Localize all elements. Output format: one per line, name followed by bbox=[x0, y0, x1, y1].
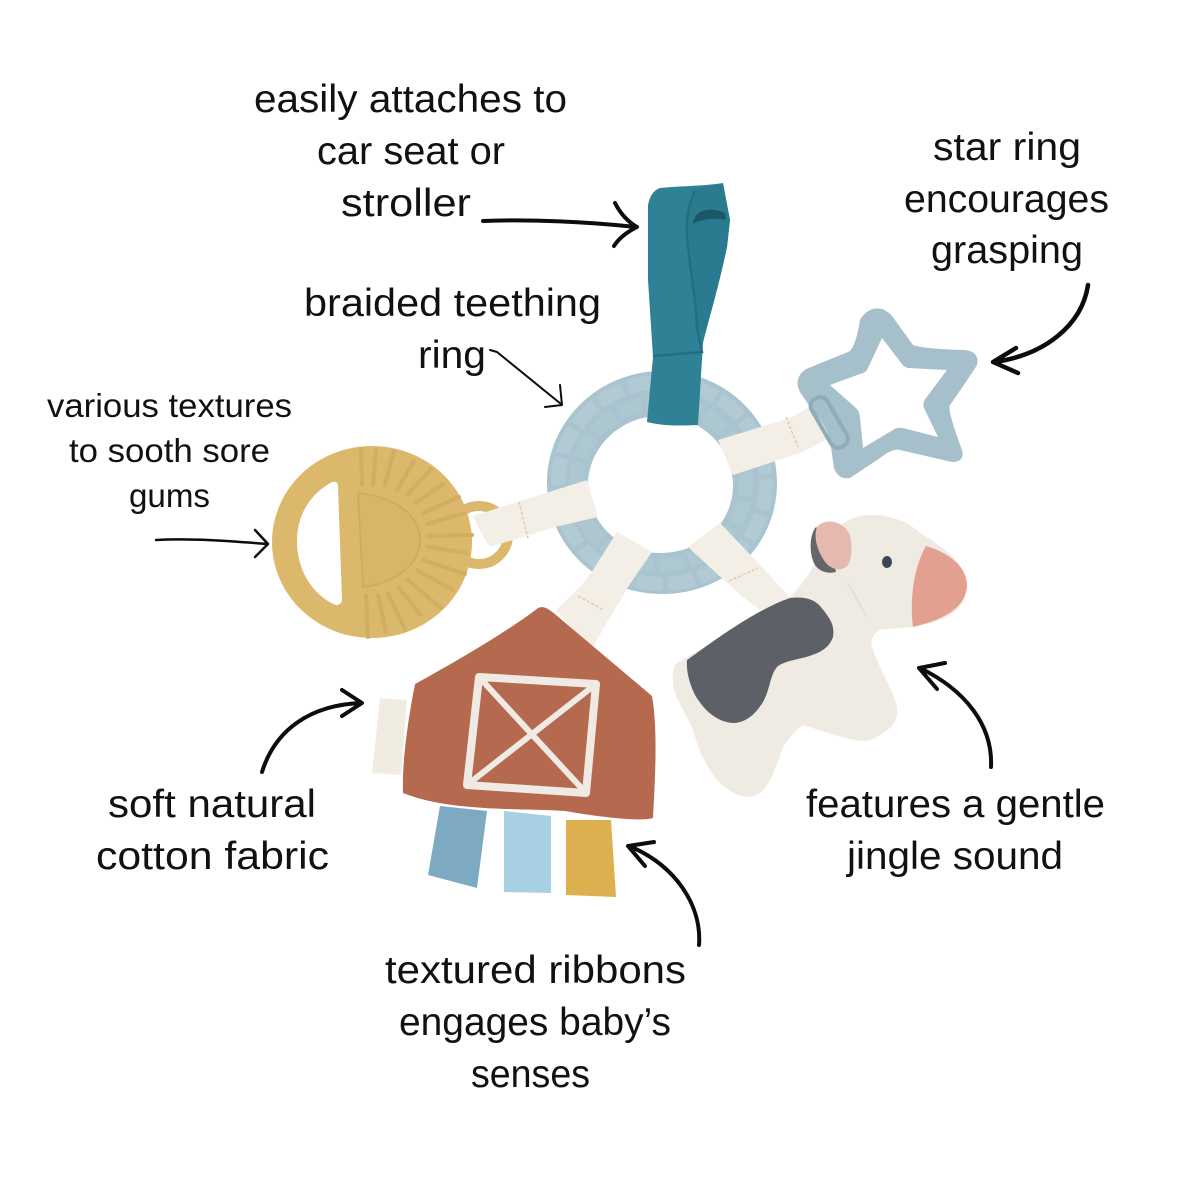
arrow to sun bbox=[156, 530, 268, 557]
arrow to star bbox=[993, 285, 1088, 373]
barn toy bbox=[372, 607, 656, 897]
label: cotton: cotton fabric bbox=[96, 835, 329, 878]
label: textures bbox=[47, 387, 292, 514]
label: braided ring bbox=[304, 282, 601, 377]
sun teether bbox=[272, 446, 508, 638]
arrow to ribbons bbox=[628, 842, 699, 945]
label: braided ring: braided teething bbox=[304, 282, 601, 325]
label: attaches: easily attaches to bbox=[254, 78, 567, 121]
label: attaches: car seat or bbox=[317, 130, 505, 173]
star ring bbox=[798, 308, 978, 478]
label: attaches bbox=[254, 78, 567, 225]
cow toy bbox=[673, 515, 967, 797]
arrow to cow bbox=[919, 663, 991, 767]
label: ribbons: engages baby’s bbox=[399, 1001, 671, 1044]
label: textures: to sooth sore bbox=[69, 432, 270, 469]
label: textures: various textures bbox=[47, 387, 292, 424]
straps connecting the ring to the toys bbox=[473, 402, 835, 650]
label: jingle: features a gentle bbox=[806, 783, 1105, 826]
label: ribbons bbox=[385, 949, 686, 1096]
label: cotton bbox=[96, 783, 329, 878]
label: star ring: encourages bbox=[904, 178, 1109, 221]
label: jingle bbox=[806, 783, 1105, 878]
label: ribbons: senses bbox=[471, 1053, 590, 1096]
label: braided ring: ring bbox=[418, 334, 486, 377]
label: textures: gums bbox=[129, 477, 210, 514]
arrow to ring bbox=[490, 350, 562, 407]
teething ring bbox=[547, 371, 777, 594]
label: cotton: soft natural bbox=[108, 783, 316, 826]
arrow to barn bbox=[262, 690, 362, 772]
label: star ring: grasping bbox=[931, 229, 1083, 272]
label: star ring bbox=[904, 126, 1109, 272]
arrow to fabric loop bbox=[483, 203, 637, 246]
label: star ring: star ring bbox=[933, 126, 1081, 169]
fabric loop bbox=[647, 183, 730, 426]
label: jingle: jingle sound bbox=[846, 835, 1063, 878]
label: ribbons: textured ribbons bbox=[385, 949, 686, 992]
label: attaches: stroller bbox=[341, 182, 471, 225]
